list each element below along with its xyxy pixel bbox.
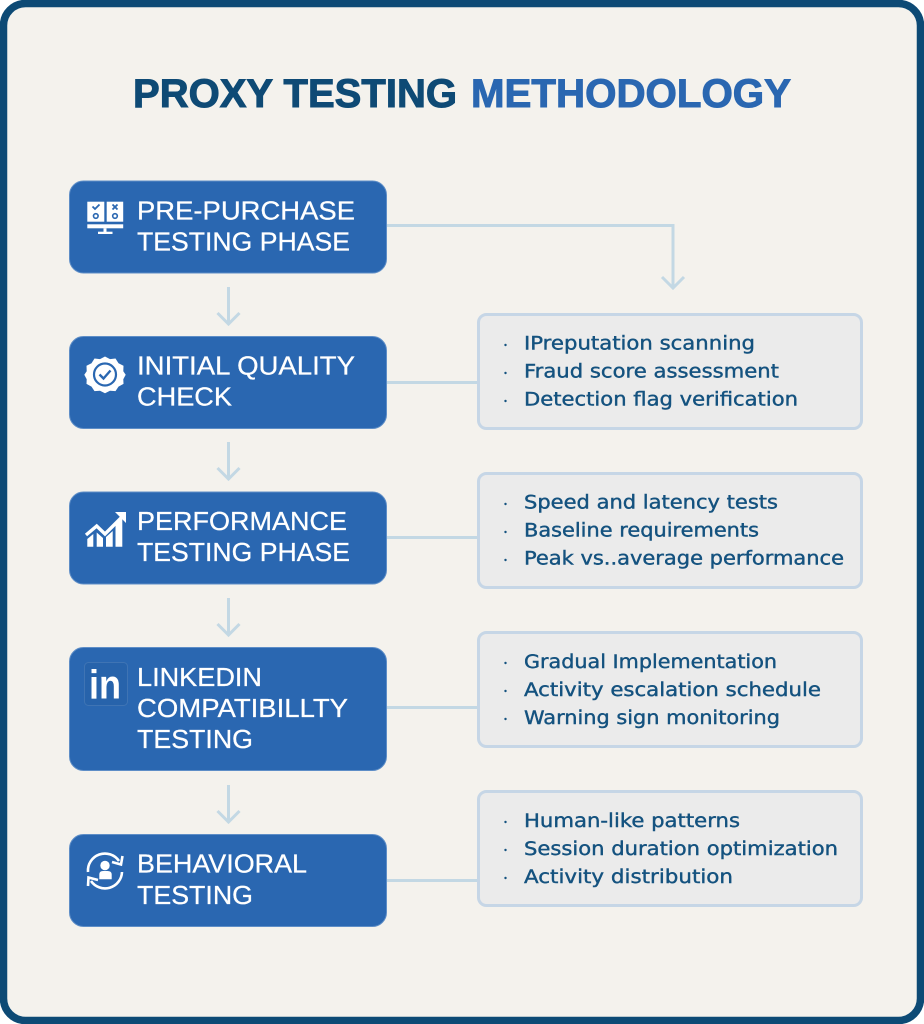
step 4: linkedin compatibility testing: TESTING — [137, 724, 253, 754]
title: METHODOLOGY — [471, 72, 791, 116]
step 5: behavioral testing: BEHAVIORAL — [137, 848, 307, 878]
connector: step 5 to panel — [387, 879, 478, 882]
arrow: step 4 to step 5 — [218, 785, 240, 822]
panel: performance testing details: Baseline requirements — [524, 520, 759, 542]
icon: monitor with test panels — [87, 202, 123, 234]
connector: step 3 to panel — [387, 536, 478, 539]
panel: linkedin compatibility details: Activity escalation schedule — [524, 680, 821, 701]
step 1: pre-purchase testing phase: TESTING PHASE — [137, 226, 350, 256]
panel: behavioral testing details: Activity distribution — [524, 867, 733, 888]
icon: user with cycle arrows — [88, 854, 122, 888]
step 2: initial quality check: CHECK — [137, 382, 233, 412]
step 4: linkedin compatibility testing — [70, 648, 386, 770]
panel: initial quality check details: Detection flag verification — [524, 390, 798, 410]
panel: linkedin compatibility details: Warning sign monitoring — [524, 708, 780, 729]
panel: initial quality check details: Fraud score assessment — [524, 362, 779, 382]
step 3: performance testing phase — [70, 492, 386, 584]
step 4: linkedin compatibility testing: LINKEDIN — [137, 662, 262, 692]
title — [133, 72, 791, 116]
panel: behavioral testing details: Session duration optimization — [524, 839, 838, 860]
step 1: pre-purchase testing phase: PRE-PURCHASE — [137, 196, 355, 226]
panel: performance testing details: Peak vs..average performance — [524, 548, 844, 570]
step 3: performance testing phase: PERFORMANCE — [137, 506, 347, 536]
panel: linkedin compatibility details: Gradual Implementation — [524, 652, 777, 673]
title: PROXY TESTING — [133, 72, 457, 116]
step 1: pre-purchase testing phase — [70, 181, 386, 273]
arrow: step 3 to step 4 — [218, 598, 240, 635]
panel: initial quality check details: IPreputation scanning — [524, 334, 755, 354]
step 4: linkedin compatibility testing: COMPATIBILLTY — [137, 693, 348, 723]
icon: quality badge — [84, 356, 126, 393]
panel: behavioral testing details — [478, 792, 862, 906]
arrow: step 1 to step 2 — [218, 287, 240, 324]
arrow: step 2 to step 3 — [218, 442, 240, 479]
step 2: initial quality check: INITIAL QUALITY — [137, 350, 355, 380]
panel: performance testing details — [478, 474, 862, 588]
connector: step 2 to panel — [387, 381, 478, 384]
panel: initial quality check details — [478, 314, 862, 428]
panel: performance testing details: Speed and latency tests — [524, 492, 778, 514]
panel: linkedin compatibility details — [478, 632, 862, 746]
step 5: behavioral testing: TESTING — [137, 880, 253, 910]
connector: step 4 to panel — [387, 706, 478, 709]
connector: pre-purchase to first detail panel — [387, 226, 684, 288]
step 5: behavioral testing — [70, 834, 386, 926]
step 2: initial quality check — [70, 336, 386, 428]
panel: behavioral testing details: Human-like patterns — [524, 811, 740, 832]
step 3: performance testing phase: TESTING PHASE — [137, 537, 350, 567]
icon: linkedin: in — [89, 661, 121, 707]
icon: rising chart — [86, 512, 126, 547]
